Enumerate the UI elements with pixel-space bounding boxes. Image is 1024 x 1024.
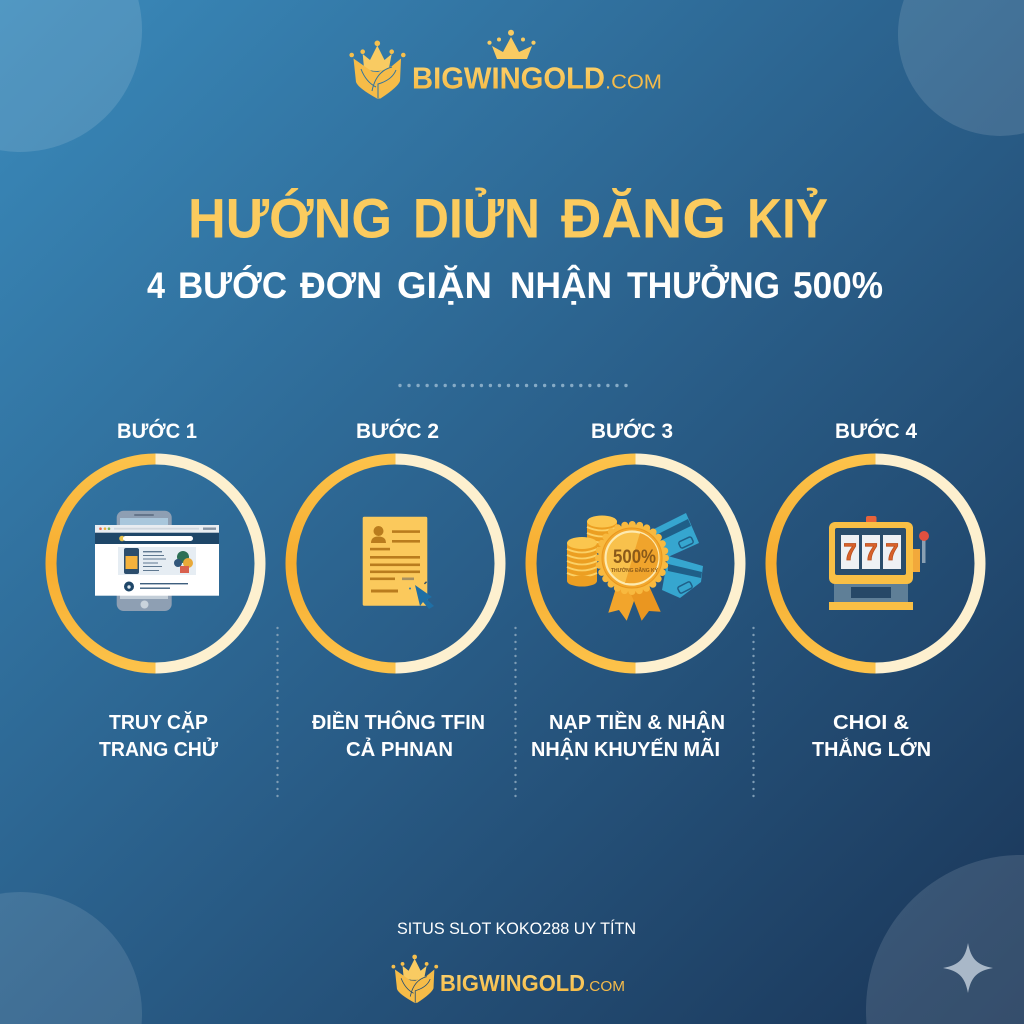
step 2 caption: CẢ PHNAN <box>346 738 453 761</box>
step 1 ring <box>51 459 260 668</box>
badge value: 500% <box>613 547 656 568</box>
icon: 500% badge <box>598 524 666 621</box>
icon: slot machine <box>829 516 929 610</box>
step 3 caption: NẠP TIỀN & NHẬN <box>549 710 725 734</box>
icon: bottom logo emblem <box>392 955 438 1003</box>
icon: form document with cursor <box>363 517 434 609</box>
step 4 caption: CHOI & <box>833 712 909 734</box>
title <box>188 186 828 250</box>
slot reel sevens: 7 <box>885 539 899 566</box>
step 3 ring <box>531 459 740 668</box>
step 1 caption: TRANG CHỬ <box>99 737 218 761</box>
step 3 caption: NHẬN KHUYẾN MÃI <box>531 737 720 761</box>
subtitle: 500% <box>793 265 883 306</box>
step 1 <box>51 419 260 761</box>
bottom logo <box>392 955 625 1003</box>
title: KIỶ <box>747 186 828 250</box>
bottom logo domain: .COM <box>585 978 625 995</box>
step 2 <box>291 419 500 761</box>
step 1 caption: TRUY CẶP <box>109 711 208 734</box>
step 3 caption <box>531 710 725 761</box>
top logo <box>349 30 662 99</box>
step 3 label: BƯỚC 3 <box>591 419 673 443</box>
subtitle <box>147 264 883 306</box>
badge small print: THƯỞNG ĐĂNG KÝ <box>611 567 658 574</box>
step 4 caption: THẮNG LỚN <box>812 737 931 761</box>
step 2 caption <box>312 710 485 761</box>
subtitle: ĐƠN <box>300 265 382 306</box>
subtitle: BƯỚC <box>178 264 287 306</box>
dotted divider <box>400 384 627 387</box>
step 4 label: BƯỚC 4 <box>835 419 917 443</box>
step 4 <box>771 419 980 761</box>
icon: phone and browser window <box>95 511 219 611</box>
logo domain: .COM <box>605 72 662 94</box>
slot reel sevens: 7 <box>843 539 857 566</box>
icon: logo emblem <box>349 40 406 98</box>
subtitle: GIẶN <box>397 265 492 306</box>
subtitle: THƯỞNG <box>627 264 780 306</box>
step 2 ring <box>291 459 500 668</box>
icon: coin stacks <box>567 516 617 586</box>
title: DIỬN <box>413 186 540 250</box>
slot reel sevens: 7 <box>864 539 878 566</box>
step 4 ring <box>771 459 980 668</box>
logo wordmark: BIGWINGOLD <box>412 60 605 96</box>
step 1 label: BƯỚC 1 <box>117 419 197 443</box>
subtitle: NHẬN <box>510 264 612 306</box>
step 2 label: BƯỚC 2 <box>356 419 439 443</box>
title: ĐĂNG <box>561 186 726 250</box>
subtitle: 4 <box>147 265 165 306</box>
step 1 caption <box>99 711 218 761</box>
bottom logo wordmark: BIGWINGOLD <box>440 970 585 996</box>
footer tagline: SITUS SLOT KOKO288 UY TÍTN <box>397 919 636 938</box>
icon: floating crown <box>487 30 536 59</box>
icon: bonus cards <box>652 513 703 598</box>
step 4 caption <box>812 712 931 761</box>
slot reel sevens <box>843 539 899 566</box>
step 2 caption: ĐIỀN THÔNG TFIN <box>312 710 485 734</box>
icon: sparkle star <box>943 943 993 993</box>
step 3 <box>531 419 740 761</box>
title: HƯỚNG <box>188 186 392 250</box>
